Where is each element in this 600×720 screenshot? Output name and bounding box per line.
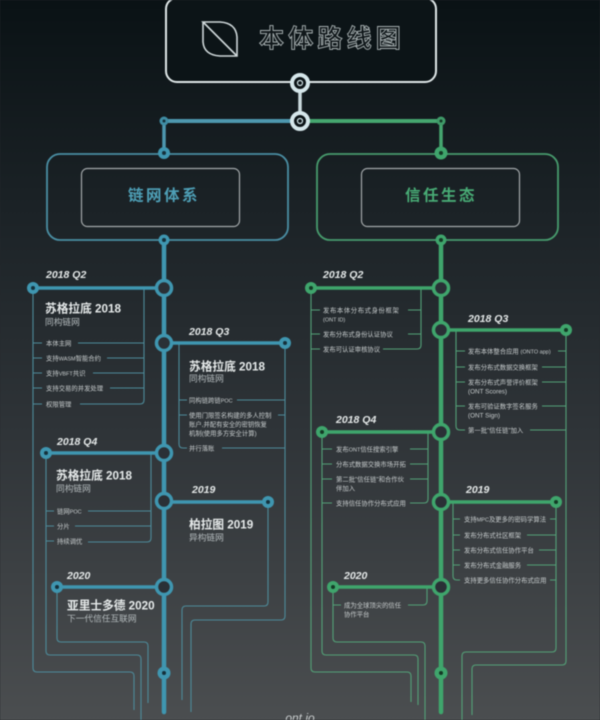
milestone: trust 2018 Q3: 发布本体整合应用 (ONTO app) bbox=[468, 346, 551, 356]
milestone: trust 2018 Q3: 发布分布式数据交换框架 bbox=[468, 362, 538, 372]
milestone: chain 2019: 异构链网 bbox=[189, 532, 224, 542]
milestone: trust 2019: 支持更多信任协作分布式应用 bbox=[464, 576, 546, 584]
milestone: chain 2018 Q2: 本体主网 bbox=[46, 338, 71, 347]
milestone: chain 2018 Q3: 苏格拉底 2018 bbox=[189, 360, 265, 374]
icon: Ontology logo bbox=[203, 22, 237, 56]
milestone: trust 2018 Q3: 2018 Q3 bbox=[467, 313, 508, 325]
milestone: trust 2018 Q3: 发布可验证数字签名服务 bbox=[468, 402, 538, 410]
panel: trust ecosystem bbox=[317, 154, 558, 240]
milestone: trust 2018 Q4: 支持信任协作分布式应用 bbox=[336, 498, 406, 508]
milestone: trust 2020: 成为全球顶尖的信任 bbox=[344, 600, 402, 610]
milestone: trust 2018 Q4: 分布式数据交换市场开拓 bbox=[336, 460, 406, 468]
heading: trust ecosystem: 信任生态 bbox=[405, 186, 477, 204]
milestone: trust 2019: 发布分布式金融服务 bbox=[464, 560, 522, 570]
milestone: trust 2018 Q2: 2018 Q2 bbox=[322, 269, 363, 281]
milestone: chain 2019: 2019 bbox=[191, 484, 216, 496]
milestone: chain 2018 Q3: 并行落账 bbox=[189, 444, 215, 452]
milestone: trust 2020 bbox=[343, 570, 402, 618]
milestone: trust 2018 Q4: 第二批"信任链"和合作伙 bbox=[336, 474, 405, 484]
milestone: chain 2018 Q3 bbox=[188, 326, 271, 452]
milestone: chain 2018 Q4: 同构链网 bbox=[56, 482, 91, 494]
milestone: trust 2018 Q4 bbox=[335, 414, 406, 508]
milestone: trust 2018 Q2: 发布分布式身份认证协议 bbox=[323, 330, 393, 338]
milestone: trust 2019: 发布分布式社区框架 bbox=[464, 530, 522, 540]
milestone: trust 2018 Q3: 发布分布式声誉评价框架 bbox=[468, 378, 538, 386]
title box bbox=[166, 0, 436, 82]
milestone: chain 2018 Q3: 账户,并配有安全的密钥恢复 bbox=[189, 420, 268, 428]
title: 本体路线图 bbox=[259, 25, 405, 53]
timeline: left thin lines bbox=[33, 288, 285, 720]
heading: chain network system: 链网体系 bbox=[128, 186, 200, 204]
timeline: trust ecosystem trunk bbox=[305, 146, 572, 712]
milestone: trust 2020: 2020 bbox=[343, 570, 368, 582]
connector: root to branches bbox=[160, 75, 446, 153]
milestone: chain 2019: 柏拉图 2019 bbox=[189, 518, 254, 532]
milestone: chain 2018 Q3: 同构链跨链POC bbox=[189, 396, 233, 404]
milestone: trust 2020: 协作平台 bbox=[344, 610, 369, 618]
milestone: trust 2019: 2019 bbox=[465, 484, 490, 496]
panel: chain network system bbox=[47, 154, 288, 240]
milestone: chain 2018 Q3: 使用门限签名构建的多人控制 bbox=[189, 410, 271, 420]
milestone: trust 2018 Q2 bbox=[322, 269, 399, 354]
milestone: chain 2020: 亚里士多德 2020 bbox=[67, 598, 155, 612]
milestone: trust 2018 Q3: (ONT Sign) bbox=[468, 412, 500, 420]
milestone: chain 2018 Q2: 同构链网 bbox=[45, 316, 80, 327]
timeline: chain network trunk bbox=[27, 147, 291, 712]
milestone: trust 2018 Q4: 伴加入 bbox=[336, 484, 356, 492]
milestone: chain 2018 Q2: 权限管理 bbox=[46, 399, 72, 408]
milestone: trust 2018 Q3: 第一批"信任链"加入 bbox=[468, 426, 524, 434]
milestone: chain 2018 Q2: 支持WASM智能合约 bbox=[46, 354, 101, 362]
milestone: chain 2020 bbox=[66, 570, 155, 624]
milestone: trust 2018 Q3 bbox=[467, 313, 551, 434]
milestone: trust 2019: 支持MPC及更多的密码学算法 bbox=[464, 514, 546, 524]
milestone: chain 2018 Q4: 苏格拉底 2018 bbox=[56, 468, 132, 482]
milestone: chain 2018 Q4: 分片 bbox=[57, 522, 70, 530]
milestone: trust 2018 Q4: 发布ONT信任搜索引擎 bbox=[336, 444, 399, 454]
milestone: trust 2018 Q2: 发布可认证审核协议 bbox=[323, 344, 381, 354]
milestone: chain 2018 Q4 bbox=[56, 436, 132, 546]
milestone: trust 2019: 发布分布式信任协作平台 bbox=[464, 546, 534, 554]
milestone: trust 2018 Q3: (ONT Scores) bbox=[468, 388, 507, 396]
milestone: chain 2020: 下一代信任互联网 bbox=[67, 612, 136, 624]
milestone: chain 2018 Q2 bbox=[45, 269, 121, 408]
milestone: chain 2018 Q2: 支持VBFT共识 bbox=[46, 368, 85, 378]
milestone: chain 2018 Q3: 2018 Q3 bbox=[188, 326, 229, 338]
milestone: chain 2018 Q4: 2018 Q4 bbox=[56, 436, 97, 448]
milestone: chain 2018 Q3: 机制(使用多方安全计算) bbox=[189, 428, 257, 438]
milestone: chain 2018 Q4: 链网POC bbox=[57, 506, 82, 516]
milestone: chain 2018 Q2: 支持交易的并发处理 bbox=[46, 384, 104, 392]
milestone: chain 2018 Q2: 苏格拉底 2018 bbox=[45, 302, 121, 316]
milestone: trust 2018 Q2: (ONT ID) bbox=[323, 318, 345, 324]
milestone: chain 2018 Q4: 持续调优 bbox=[57, 536, 83, 546]
milestone: trust 2018 Q4: 2018 Q4 bbox=[335, 414, 376, 426]
milestone: chain 2018 Q2: 2018 Q2 bbox=[45, 269, 86, 281]
milestone: chain 2019 bbox=[189, 484, 254, 542]
timeline: right thin lines bbox=[311, 288, 566, 720]
milestone: trust 2018 Q2: 发布本体分布式身份框架 bbox=[323, 306, 399, 314]
milestone: chain 2020: 2020 bbox=[66, 570, 91, 582]
milestone: trust 2019 bbox=[464, 484, 546, 584]
milestone: chain 2018 Q3: 同构链网 bbox=[189, 372, 224, 384]
